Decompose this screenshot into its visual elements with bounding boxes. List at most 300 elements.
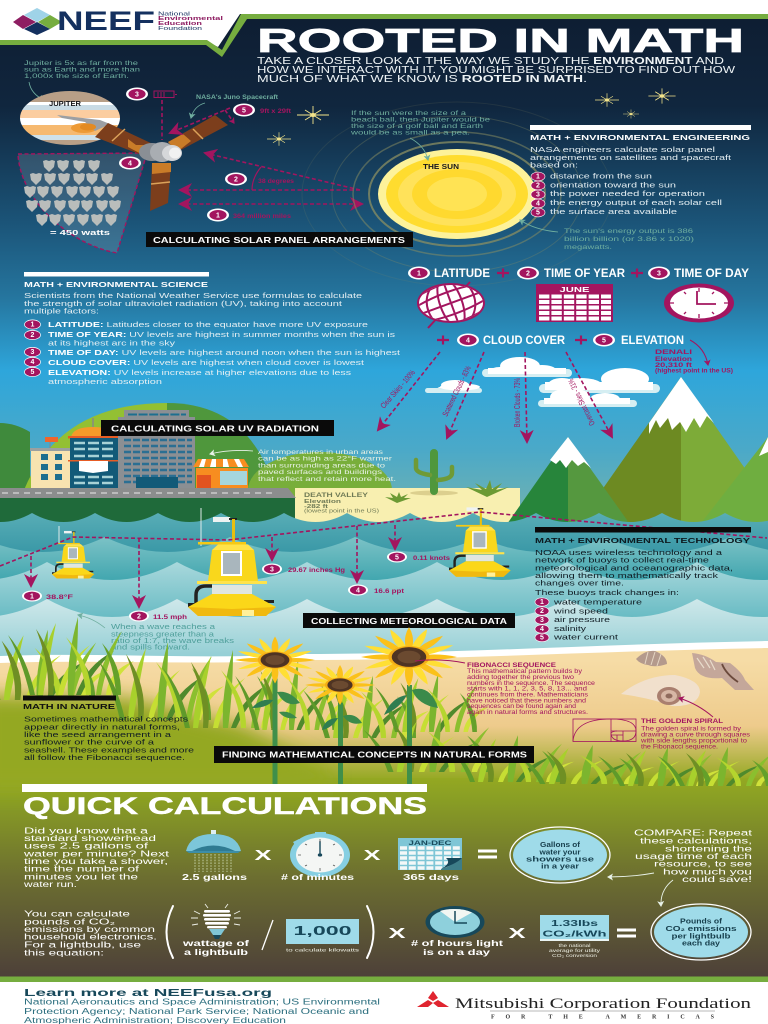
result circle: gallons: water your (538, 847, 581, 856)
label: overcast skies: Overcast Skies - 31% (566, 377, 597, 427)
parentheses (166, 906, 374, 958)
list: water temperature (553, 598, 642, 606)
reading 4: 4 (356, 587, 360, 594)
reading 3: 29.67 inches Hg (288, 567, 345, 574)
note: wave steepness: and spills forward. (111, 644, 190, 652)
note: Jupiter (24, 60, 140, 100)
label: wattage: a lightbulb (184, 947, 248, 957)
note: Jupiter: Jupiter is 5x as far from the (24, 60, 138, 67)
note: sun energy output (520, 220, 694, 251)
note: compare: could save! (682, 874, 752, 884)
note: wave steepness: When a wave reaches a (111, 624, 215, 631)
list: 2 (540, 608, 544, 615)
reading 5 (387, 552, 451, 562)
note: Fibonacci sequence: This mathematical pattern builds by (467, 668, 583, 675)
body: NASA engineers calculate solar panel (530, 145, 716, 154)
solar cells (24, 160, 121, 226)
badge 2 (225, 172, 247, 186)
result circle: gallons: Gallons of (540, 840, 581, 849)
heading: quick calculations: QUICK CALCULATIONS (23, 793, 427, 820)
body (535, 548, 733, 597)
list: 2 (31, 332, 35, 339)
footer sources: National Aeronautics and Space Administration; US Environmental (24, 998, 380, 1006)
reading 2: 11.5 mph (153, 614, 187, 621)
text: CO2 calculation: this equation: (24, 947, 104, 957)
header banner with NEEF logo (0, 0, 768, 57)
text: shower calculation: time you take a shower, (24, 856, 168, 866)
foundation name: Foundation (158, 26, 202, 32)
body: arrangements on satellites and spacecraft (530, 153, 731, 162)
spacecraft (57, 115, 228, 211)
list: 3 (540, 617, 544, 624)
label bar: UV radiation: CALCULATING SOLAR UV RADIATION (111, 424, 319, 434)
value: angle: 38 degrees (258, 178, 294, 185)
note: compare: how much you (663, 866, 752, 876)
note: urban heat (210, 449, 396, 483)
note: compare: shortening the (665, 843, 752, 853)
panel: environmental technology (535, 527, 751, 642)
list: water current (553, 632, 619, 642)
Mitsubishi subline: FOR THE AMERICAS (491, 1014, 715, 1020)
label: hours light: # of hours light (411, 938, 503, 948)
text: shower calculation: minutes you let the (24, 871, 138, 881)
note: wave steepness: ratio of 1:7, the wave breaks (111, 638, 235, 645)
intro text: TAKE A CLOSER LOOK AT THE WAY WE STUDY THE ENVIRONMENT AND (257, 56, 724, 67)
label: the sun: THE SUN (423, 162, 459, 171)
label: clear skies: Clear Skies - 100% (379, 368, 417, 410)
text: shower calculation: time the number of (24, 864, 140, 874)
icon: June calendar: JUNE (560, 287, 590, 294)
body: network of buoys to collect real-time (535, 556, 709, 565)
heading: quick calculations (22, 784, 427, 820)
note: Death Valley: DEATH VALLEY (304, 492, 369, 499)
text: CO2 calculation: For a lightbulb, use (24, 940, 141, 950)
note: golden spiral: the Fibonacci sequence. (641, 744, 718, 750)
list (535, 598, 642, 642)
note: sun size comparison: If the sun were the size of a (351, 110, 466, 117)
list: wind speed (553, 606, 608, 616)
note: golden spiral: drawing a curve through squares (641, 732, 750, 738)
sunflower 1 (235, 636, 315, 784)
label bar: meteorological data (303, 613, 515, 628)
label: hours light (411, 938, 503, 957)
note: Fibonacci sequence: continues from there. Mathematicians (467, 692, 588, 699)
UV factors second row: CLOUD COVER (483, 333, 565, 347)
note: Denali: DENALI (655, 349, 692, 356)
badge 1: 1 (216, 213, 220, 220)
box: CO2 conversion: CO₂ conversion (552, 953, 597, 959)
icon: nautilus shell (621, 675, 713, 717)
note: compare: usage time of each (635, 851, 752, 861)
text: shower calculation: water per minute? Next (22, 848, 170, 858)
stars (267, 88, 676, 146)
list: distance from the sun (550, 172, 652, 180)
buoys (52, 507, 511, 616)
list: CLOUD COVER: UV levels are highest when cloud cover is lowest (48, 358, 364, 367)
list: 1 (540, 599, 544, 606)
label: 365 days: 365 days (403, 872, 460, 882)
operator divide (262, 920, 273, 950)
list: 4 (31, 359, 35, 366)
body: allowing them to mathematically track (535, 571, 718, 580)
box: 1,000: 1,000 (294, 923, 352, 938)
NEEF wordmark: NEEF (57, 6, 155, 36)
result circle: CO2: each day (682, 938, 721, 948)
UV factors header row: TIME OF DAY (674, 266, 749, 280)
label: 2.5 gallons: 2.5 gallons (182, 872, 247, 882)
Mitsubishi wordmark: Mitsubishi Corporation Foundation (455, 996, 752, 1012)
note: Fibonacci sequence: sequences can be found again and (467, 703, 577, 710)
note: urban heat: than surrounding areas due to (258, 462, 385, 470)
note: golden spiral: The golden spiral is formed by (641, 726, 742, 732)
icon: globe (417, 282, 485, 328)
list: atmospheric absorption (48, 377, 162, 386)
water waves (0, 513, 768, 670)
text: shower calculation: uses 2.5 gallons of (24, 841, 149, 851)
label: Juno spacecraft: NASA's Juno Spacecraft (196, 94, 279, 101)
icon: shower head (186, 830, 241, 872)
UV factors header row: LATITUDE (434, 266, 490, 280)
list: the power needed for operation (550, 189, 705, 198)
result circle: CO2: per lightbulb (672, 932, 731, 940)
panel: math in nature (23, 696, 194, 762)
mountains (507, 377, 768, 540)
cloud 4 (538, 388, 637, 407)
text: CO2 calculation: pounds of CO₂ (24, 916, 115, 926)
icon: NEEF diamonds (13, 8, 62, 35)
list: 5 (536, 210, 540, 217)
note: Fibonacci sequence: starts with 1, 1, 2, 3, 5, 8, 13... and (467, 686, 588, 693)
operator times: X (508, 925, 526, 942)
body: meteorological and oceanographic data, (535, 563, 733, 572)
icon: stopwatch (290, 832, 350, 877)
list: the surface area available (550, 207, 677, 216)
icon: scallop shell (636, 651, 667, 666)
badge 2: 2 (234, 177, 238, 184)
list: 3 (31, 349, 35, 356)
list: ELEVATION: UV levels increase at higher elevations due to less (48, 368, 351, 377)
label: 450 watts: = 450 watts (50, 228, 110, 237)
UV factors header row: TIME OF YEAR (544, 266, 625, 280)
cloud 3 (539, 368, 660, 393)
title: ROOTED IN MATH (257, 22, 744, 59)
footer heading: Learn more at NEEFusa.org (24, 988, 272, 999)
note: Death Valley (304, 492, 379, 514)
text: shower calculation (22, 825, 170, 889)
note: wave steepness (78, 615, 235, 652)
label: minutes: # of minutes (281, 872, 355, 882)
sunflower 3 (361, 627, 457, 785)
note: Jupiter: 1,000x the size of Earth. (24, 73, 129, 80)
background sky (0, 0, 768, 530)
operator times: X (254, 847, 272, 864)
heading: MATH + ENVIRONMENTAL SCIENCE (24, 280, 208, 289)
list: salinity (554, 624, 586, 633)
body: the strength of solar ultraviolet radiation (UV), taking into account (24, 299, 342, 308)
text: CO2 calculation: You can calculate (24, 909, 130, 919)
body: seashell. These examples and more (24, 745, 194, 754)
label bar: natural forms (214, 746, 534, 763)
cloud 1 (425, 380, 482, 393)
list: TIME OF DAY: UV levels are highest around noon when the sun is highest (48, 348, 400, 357)
operator times: X (364, 847, 380, 864)
result circle: gallons (510, 827, 610, 883)
teal building with dome (68, 418, 118, 489)
body: NOAA uses wireless technology and a (535, 548, 723, 557)
reading 1: 38.8°F (46, 593, 73, 601)
icon: June calendar (536, 284, 613, 322)
label: scattered clouds: Scattered Clouds - 83% (441, 364, 473, 418)
body (24, 291, 362, 316)
footer (0, 976, 768, 1024)
sand desert (295, 488, 520, 525)
intro text: HOW WE INTERACT WITH IT. YOU MIGHT BE SURPRISED TO FIND OUT HOW (257, 65, 736, 76)
arrow: Juno callout (191, 103, 205, 118)
footer sources: Protection Agency; National Park Service; National Oceanic and (24, 1007, 369, 1016)
badge 3: 3 (135, 92, 139, 99)
note: Fibonacci sequence (415, 660, 596, 716)
intro text: MUCH OF WHAT WE KNOW IS ROOTED IN MATH . (257, 74, 587, 85)
note: golden spiral: with side lengths proportional to (640, 738, 748, 744)
reading 1 (22, 590, 73, 602)
result circle: CO2 (651, 904, 751, 960)
foundation name: Education (158, 21, 202, 27)
note: Jupiter: sun as Earth and more than (24, 66, 140, 74)
heading: MATH IN NATURE (23, 702, 115, 711)
clouds (425, 357, 660, 407)
note: Death Valley: (lowest point in the US) (304, 508, 379, 514)
list (24, 320, 400, 386)
hills behind the city (0, 403, 392, 528)
note: urban heat: that reflect and retain more heat. (258, 476, 396, 483)
note: urban heat: can be as high as 22°F warmer (258, 454, 393, 462)
sunflower 2 (305, 665, 375, 784)
reading 4: 16.6 ppt (374, 588, 405, 595)
icon: Mitsubishi diamonds (417, 991, 449, 1007)
reading 2 (129, 610, 187, 622)
badge 1 (207, 208, 229, 222)
body: These buoys track changes in: (535, 588, 679, 597)
reading 5: 5 (395, 554, 399, 561)
note: Fibonacci sequence: numbers in the sequence. The sequence (467, 680, 596, 687)
heading: MATH + ENVIRONMENTAL TECHNOLOGY (535, 536, 750, 545)
list: at its highest arc in the sky (48, 338, 175, 348)
foundation name (158, 12, 224, 32)
text: shower calculation: standard showerhead (24, 833, 156, 843)
icon: clock (664, 284, 734, 322)
note: golden spiral: THE GOLDEN SPIRAL (641, 718, 723, 725)
body: Sometimes mathematical concepts (24, 715, 188, 724)
UV factors header row: 3 (657, 271, 661, 278)
reading 1: 1 (30, 593, 34, 600)
note: golden spiral (640, 718, 750, 750)
note: Denali (655, 340, 733, 374)
note: compare: these calculations, (640, 835, 752, 845)
orbit rings (302, 102, 612, 286)
UV factors second row: 5 (602, 338, 606, 345)
note: compare (608, 828, 753, 906)
note: sun size comparison: beach ball, then Jupiter would be (351, 116, 490, 124)
result circle: CO2: Pounds of (680, 916, 723, 926)
body: changes over time. (535, 579, 624, 588)
body: all follow the Fibonacci sequence. (24, 753, 185, 762)
operator equals (617, 930, 636, 936)
text: CO2 calculation (24, 909, 157, 957)
text: CO2 calculation: emissions by common (24, 924, 155, 934)
intro text (257, 56, 736, 85)
list: 4 (540, 626, 544, 633)
label: wattage: wattage of (181, 938, 249, 948)
body: multiple factors: (24, 306, 99, 316)
icon: battery (154, 91, 177, 98)
badge 3 (126, 88, 148, 100)
cloud cover arrows with labels (378, 352, 612, 442)
panel: environmental engineering (530, 125, 751, 217)
right buoy (449, 507, 511, 577)
footer sources (24, 998, 380, 1024)
note: sun size comparison: the size of a golf ball and Earth (351, 123, 483, 130)
box: CO2 conversion: average for utility (549, 948, 601, 954)
box: CO2 conversion: the national (558, 943, 590, 949)
list: 5 (540, 635, 544, 642)
text: shower calculation: Did you know that a (24, 825, 148, 835)
badge 5: 5 (242, 108, 246, 115)
list: LATITUDE: Latitudes closer to the equator have more UV exposure (48, 320, 368, 329)
text: shower calculation: water run. (23, 879, 77, 889)
UV factors second row (437, 333, 684, 347)
icon: conch shell (692, 653, 754, 690)
operator times: X (388, 925, 406, 942)
note: Denali: Elevation (655, 356, 692, 363)
operator equals (478, 851, 497, 857)
city buildings (30, 410, 249, 489)
reading 3 (262, 564, 345, 574)
note: Fibonacci sequence: have noticed that these numbers and (467, 697, 587, 704)
body (24, 715, 194, 762)
text: CO2 calculation: household electronics. (24, 932, 157, 942)
body: based on: (530, 160, 578, 170)
list: orientation toward the sun (550, 180, 676, 190)
tall grey building (118, 410, 195, 489)
body: sunflower or the curve of a (24, 738, 155, 747)
note: wave steepness: steepness greater than a (111, 632, 214, 638)
small buoy (52, 531, 94, 578)
box: 1,000: to calculate kilowatts (286, 948, 360, 954)
sunflowers (235, 627, 457, 785)
cream building (30, 437, 71, 489)
note: Fibonacci sequence: FIBONACCI SEQUENCE (467, 662, 557, 669)
road (0, 488, 296, 524)
result circle: CO2: CO₂ emissions (666, 924, 736, 933)
result circle: gallons: in a year (541, 862, 579, 871)
body: like the seed arrangement in a (24, 730, 172, 739)
icon: light bulb (191, 904, 241, 939)
note: Fibonacci sequence: adding together the previous two (467, 674, 575, 681)
list: air pressure (554, 615, 610, 624)
note: Denali: (highest point in the US) (655, 368, 733, 374)
body: appear directly in natural forms, (24, 722, 180, 731)
shop (193, 459, 249, 489)
box: CO2 conversion (540, 915, 609, 959)
list: 3 (536, 192, 540, 199)
icon: hours clock (426, 906, 484, 938)
grass (0, 617, 768, 786)
note: sun size comparison: would be as small as a pea. (350, 130, 470, 136)
badge 5 (233, 104, 255, 116)
note: compare: COMPARE: Repeat (634, 828, 753, 838)
UV factors header row: 1 (417, 271, 421, 278)
reading 2: 2 (137, 613, 141, 620)
sun (302, 102, 612, 286)
value: panel size: 9ft x 29ft (260, 108, 292, 115)
value: distance: 364 million miles (233, 213, 291, 220)
heading: MATH + ENVIRONMENTAL ENGINEERING (530, 133, 750, 142)
box: CO2 conversion: CO₂/kWh (542, 928, 606, 938)
note: urban heat: paved surfaces and buildings (258, 469, 383, 476)
label: wattage (181, 938, 249, 957)
note: compare: resource, to see (654, 859, 752, 869)
icon: year calendar (398, 838, 462, 870)
list: 2 (536, 183, 540, 190)
desert plants (385, 480, 509, 503)
UV factors second row: 4 (466, 338, 470, 345)
list: TIME OF YEAR: UV levels are highest in summer months when the sun is (48, 330, 395, 339)
panel: solar cell area (18, 153, 147, 253)
list: 1 (31, 322, 35, 329)
list: 4 (536, 201, 540, 208)
icon: cactus (410, 453, 458, 496)
note: Fibonacci sequence: again in natural forms and structures. (467, 709, 588, 716)
result circle: gallons: showers use (526, 854, 594, 864)
solar diagram arrows and callouts (119, 88, 362, 222)
cloud 2 (482, 357, 572, 377)
label bar: meteorological data: COLLECTING METEOROLOGICAL DATA (311, 616, 507, 626)
body (530, 145, 731, 170)
shore foam and sand (0, 641, 768, 977)
list: 5 (31, 369, 35, 376)
body: Scientists from the National Weather Service use formulas to calculate (24, 291, 362, 300)
reading 3: 3 (270, 566, 274, 573)
label bar: natural forms: FINDING MATHEMATICAL CONCEPTS IN NATURAL FORMS (222, 750, 528, 760)
label bar: solar panels (146, 232, 413, 247)
note: sun energy output: The sun's energy output is 386 (564, 228, 693, 235)
note: sun size comparison (350, 110, 490, 160)
UV factors header row (408, 266, 749, 280)
buoy measurement arrows (0, 512, 767, 622)
note: Denali: 20,310 ft (655, 362, 693, 369)
list: the energy output of each solar cell (550, 198, 723, 207)
note: sun energy output: billion billion (or 3.86 x 1020) (564, 236, 694, 243)
note: Death Valley: -282 ft (304, 504, 328, 510)
box: 1,000 (286, 919, 360, 954)
badge 4: 4 (128, 161, 132, 168)
label bar: solar panels: CALCULATING SOLAR PANEL ARRANGEMENTS (153, 235, 406, 245)
foundation name: National (158, 12, 190, 18)
label: hours light: is on a day (423, 947, 491, 957)
icon: golden spiral diagram (573, 719, 636, 742)
reading 5: 0.11 knots (413, 555, 451, 562)
badge 4 (119, 156, 141, 170)
label: Jupiter: JUPITER (49, 99, 82, 108)
Jupiter planet (20, 90, 120, 146)
foundation name: Environmental (158, 16, 224, 22)
UV factors second row: ELEVATION (621, 333, 684, 347)
reading 4 (348, 584, 405, 596)
label bar: UV radiation (101, 420, 334, 436)
note: sun energy output: megawatts. (564, 244, 612, 251)
label: broken clouds: Broken Clouds - 73% (513, 378, 522, 427)
list: 1 (536, 174, 540, 181)
